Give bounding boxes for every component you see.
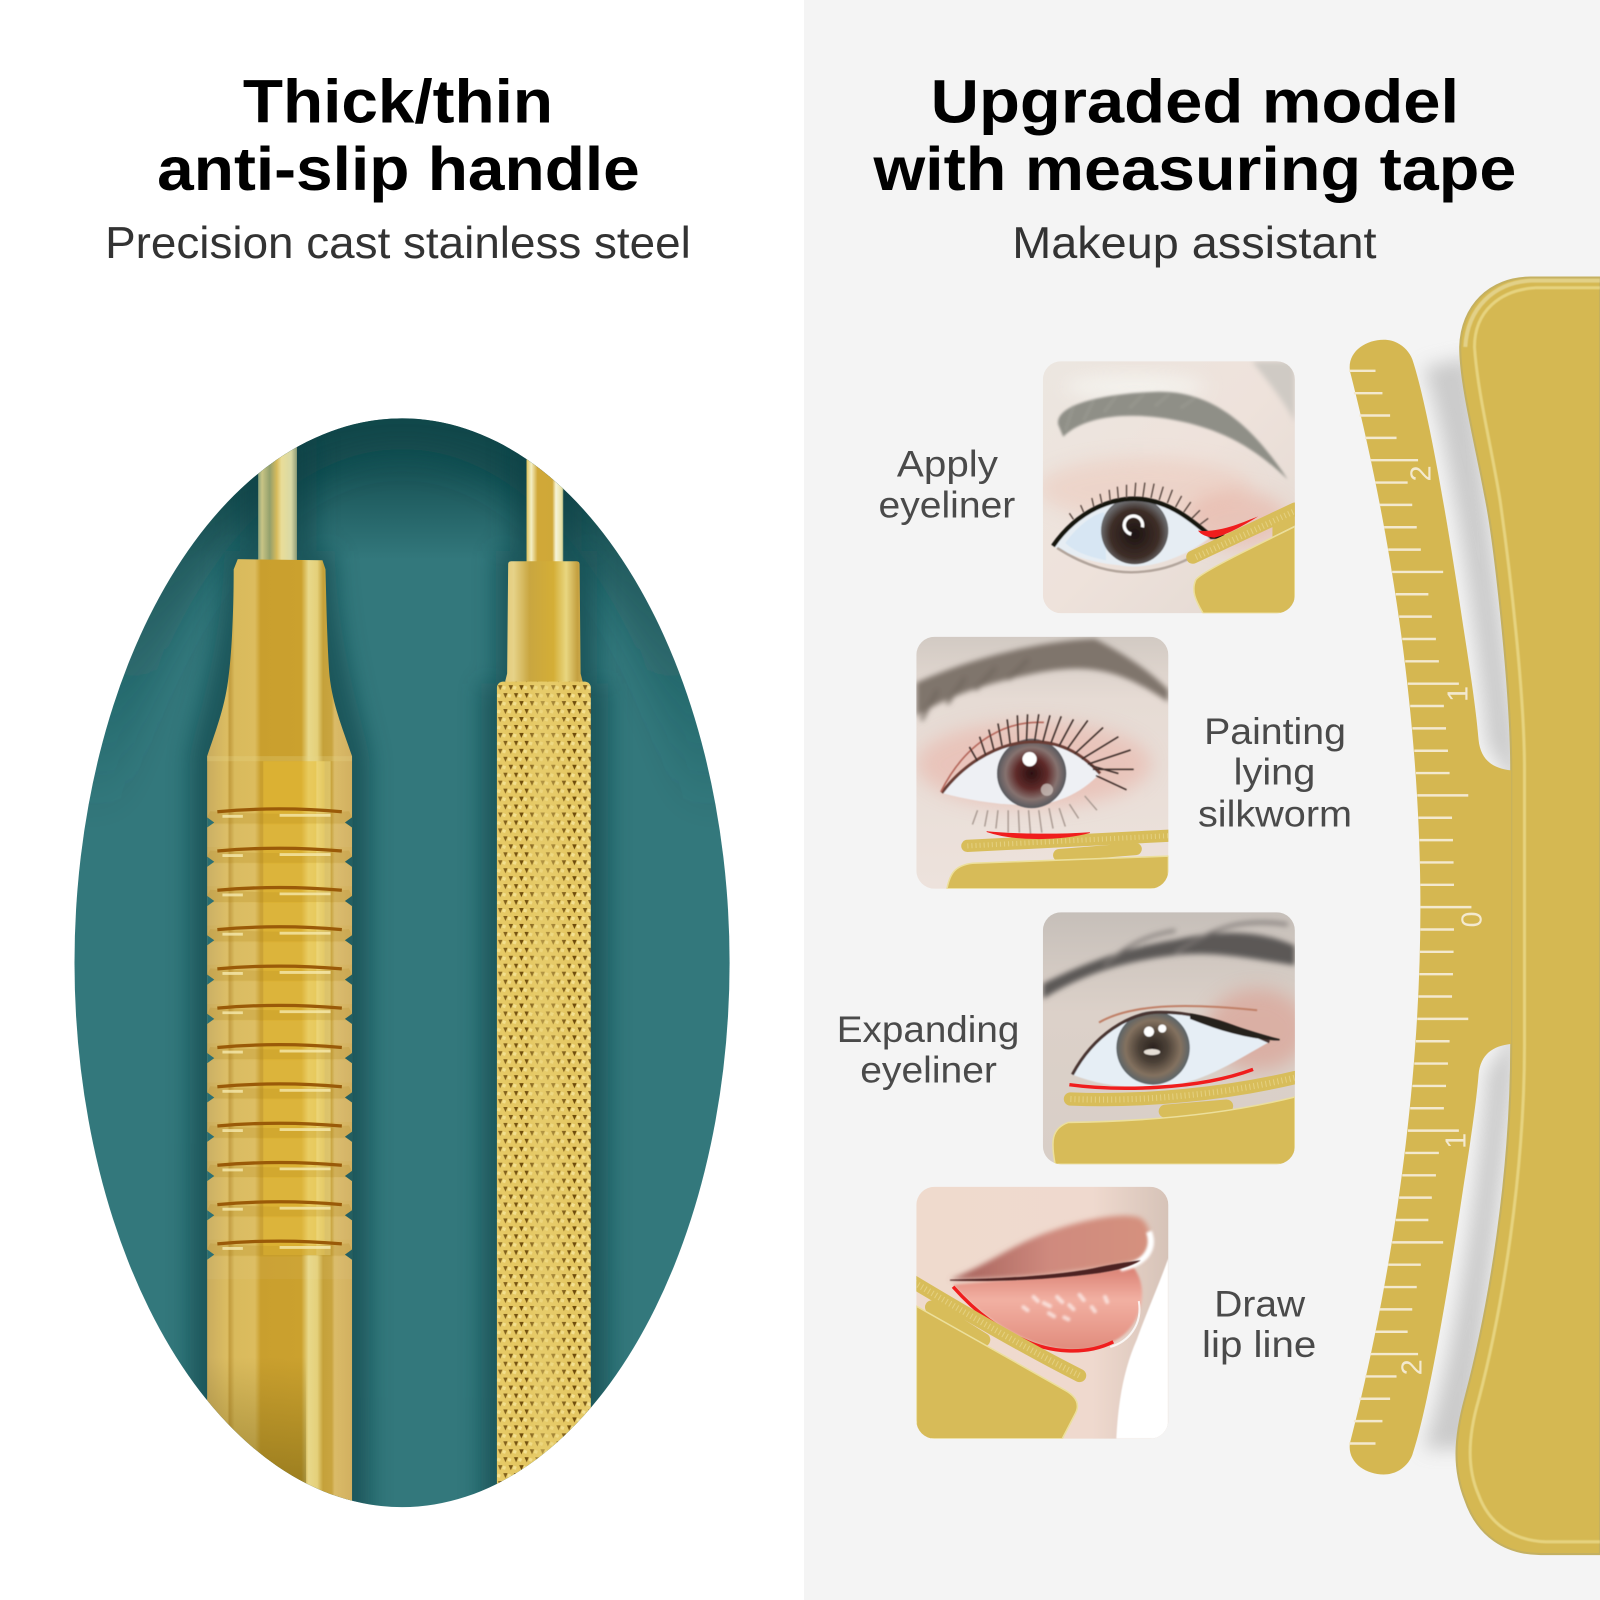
gold measuring tool [1349,278,1600,1554]
mini ruler [1193,509,1295,557]
label: expanding eyeliner: Expanding [837,1009,1019,1050]
left heading [157,67,640,203]
left heading: Thick/thin [243,67,553,135]
label: expanding eyeliner [837,1009,1019,1091]
left subheading: Precision cast stainless steel [105,217,691,268]
eye [1053,483,1224,572]
photo card: expanding eyeliner [1043,912,1308,1164]
white neck background [1116,1258,1168,1439]
ruler number labels: 2 [1406,466,1438,481]
upper lip [950,1216,1150,1280]
eyebrow [916,639,1168,720]
eye [1072,1006,1280,1087]
ruler number labels: 1 [1442,686,1474,702]
red eyeliner line [1069,1069,1253,1088]
lip parting line [950,1260,1141,1281]
right panel background [804,0,1600,1600]
ruler number labels: 1 [1440,1133,1472,1149]
label: painting lying silkworm: silkworm [1198,794,1352,835]
lower lip [953,1266,1142,1350]
right heading: Upgraded model [931,67,1459,135]
thin rod of thick handle [258,447,297,560]
label: apply eyeliner: Apply [897,444,999,485]
photo card: painting lying silkworm [916,637,1168,889]
label: expanding eyeliner: eyeliner [860,1050,997,1091]
thick grooved handle [207,559,352,1531]
mini ruler [911,1281,1080,1376]
lip gloss highlights [1023,1295,1107,1319]
right subheading: Makeup assistant [1012,217,1377,268]
photo card: apply eyeliner [1038,361,1295,613]
thin rod of knurled handle [527,449,563,563]
tool shadow [1423,357,1520,1449]
mini plate [1053,1097,1295,1164]
teal oval with two gold handles [74,418,730,1551]
photo card: draw lip line [911,1187,1168,1439]
right heading: with measuring tape [872,135,1516,203]
right heading [872,67,1516,203]
mini plate [916,1306,1077,1439]
mini plate [1194,527,1295,613]
label: draw lip line: lip line [1202,1324,1316,1365]
ruler number labels: 2 [1396,1359,1428,1375]
ruler number labels [1396,466,1489,1375]
mini ruler [967,836,1168,855]
label: apply eyeliner: eyeliner [879,484,1015,525]
eye [941,714,1134,835]
left heading: anti-slip handle [157,135,640,203]
label: painting lying silkworm: Painting [1204,711,1346,752]
label: painting lying silkworm: lying [1234,752,1315,793]
eyebrow [1058,392,1288,480]
knurled slim handle [497,561,591,1531]
teal oval backdrop [74,418,730,1507]
curved ruler [1350,340,1511,1474]
red eyeliner mark [1198,516,1258,538]
ruler tick marks [1349,371,1471,1443]
label: painting lying silkworm [1198,711,1352,835]
ruler number labels: 0 [1457,911,1489,927]
label: apply eyeliner [879,444,1015,525]
left panel background [0,0,804,1600]
red lip line [953,1287,1113,1351]
red silkworm line [987,832,1090,839]
eyebrow [1043,922,1295,999]
large gold plate [1457,278,1600,1554]
label: draw lip line [1202,1283,1316,1365]
handle shadows [190,429,369,1551]
mini ruler [1070,1078,1295,1111]
label: draw lip line: Draw [1214,1283,1306,1324]
mini plate [947,856,1168,889]
